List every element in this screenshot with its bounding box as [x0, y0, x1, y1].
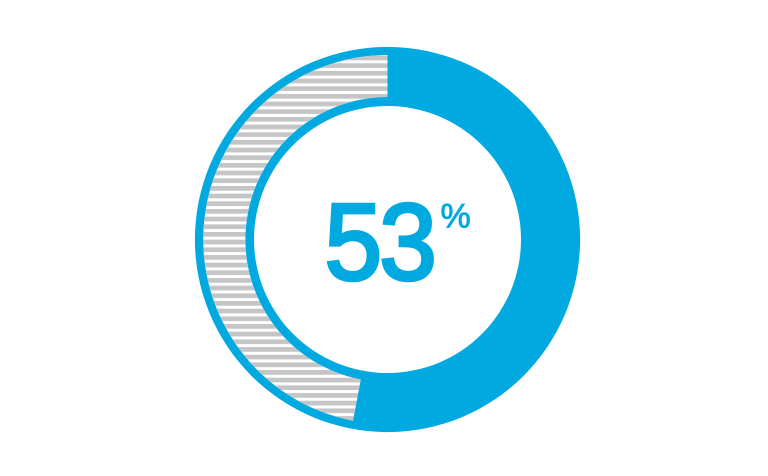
- blue ring and filled segment: [195, 47, 580, 432]
- white centre of the ring: [254, 106, 521, 373]
- percentage value: 53: [324, 181, 434, 303]
- percent sign: %: [440, 198, 471, 236]
- remaining segment: grey stripes: [203, 55, 388, 421]
- remaining segment background: [203, 55, 388, 421]
